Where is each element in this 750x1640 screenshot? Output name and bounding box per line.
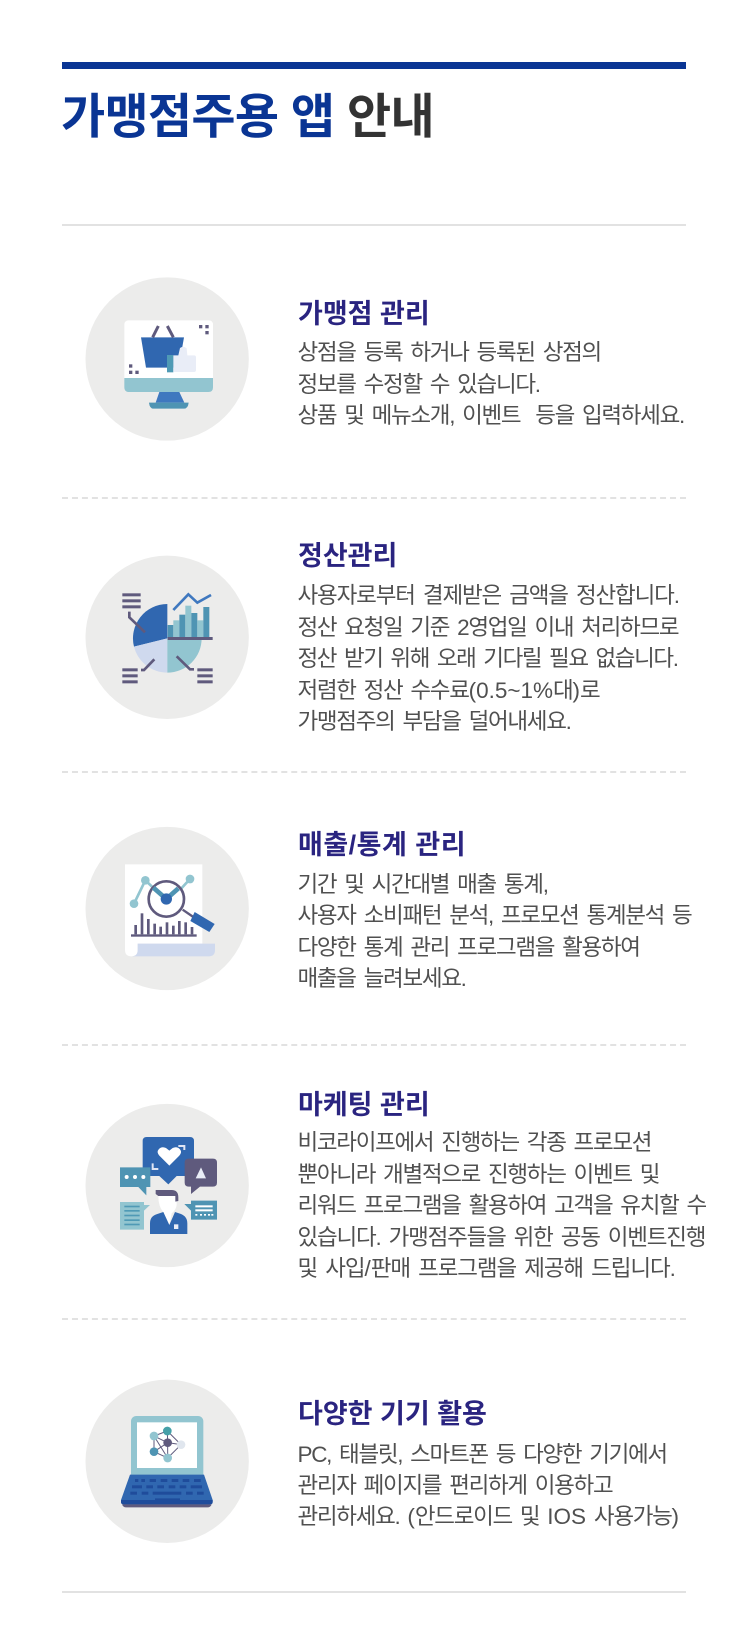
icon: monitor with shopping basket	[86, 278, 249, 440]
heading: 매출/통계 관리	[298, 830, 466, 860]
title: 가맹점주용 앱 안내	[61, 91, 434, 144]
description: 상점을 등록 하거나 등록된 상점의 정보를 수정할 수 있습니다. 상품 및 메뉴소개, 이벤트 등을 입력하세요.	[298, 340, 684, 428]
panel: settlement management	[86, 541, 679, 734]
description: 기간 및 시간대별 매출 통계, 사용자 소비패턴 분석, 프로모션 통계분석 등 다양한 통계 관리 프로그램을 활용하여 매출을 늘려보세요.	[298, 872, 691, 991]
description: 사용자로부터 결제받은 금액을 정산합니다. 정산 요청일 기준 2영업일 이내 처리하므로 정산 받기 위해 오래 기다릴 필요 없습니다. 저렴한 정산 수수료(0.5~1%대)로 가맹점주의 부담을 덜어내세요.	[298, 583, 679, 734]
icon: pie and bar chart	[86, 556, 249, 719]
panel: store management	[86, 278, 684, 440]
description: 비코라이프에서 진행하는 각종 프로모션 뿐아니라 개별적으로 진행하는 이벤트 및 리워드 프로그램을 활용하여 고객을 유치할 수 있습니다. 가맹점주들을 위한 공동 이벤트진행 및 사입/판매 프로그램을 제공해 드립니다.	[298, 1130, 706, 1281]
heading: 가맹점 관리	[298, 298, 430, 328]
icon: laptop with network	[86, 1380, 249, 1543]
description: PC, 태블릿, 스마트폰 등 다양한 기기에서 관리자 페이지를 편리하게 이용하고 관리하세요. (안드로이드 및 IOS 사용가능)	[298, 1442, 679, 1529]
icon: person with speech bubbles	[86, 1104, 249, 1267]
heading: 다양한 기기 활용	[298, 1399, 487, 1429]
heading: 마케팅 관리	[298, 1090, 430, 1120]
panel: sales and statistics management	[86, 827, 692, 991]
icon: report with magnifier	[86, 827, 249, 990]
heading: 정산관리	[298, 541, 397, 571]
top accent bar	[62, 62, 686, 69]
panel: marketing management	[86, 1090, 706, 1281]
panel: multi-device use	[86, 1380, 679, 1543]
